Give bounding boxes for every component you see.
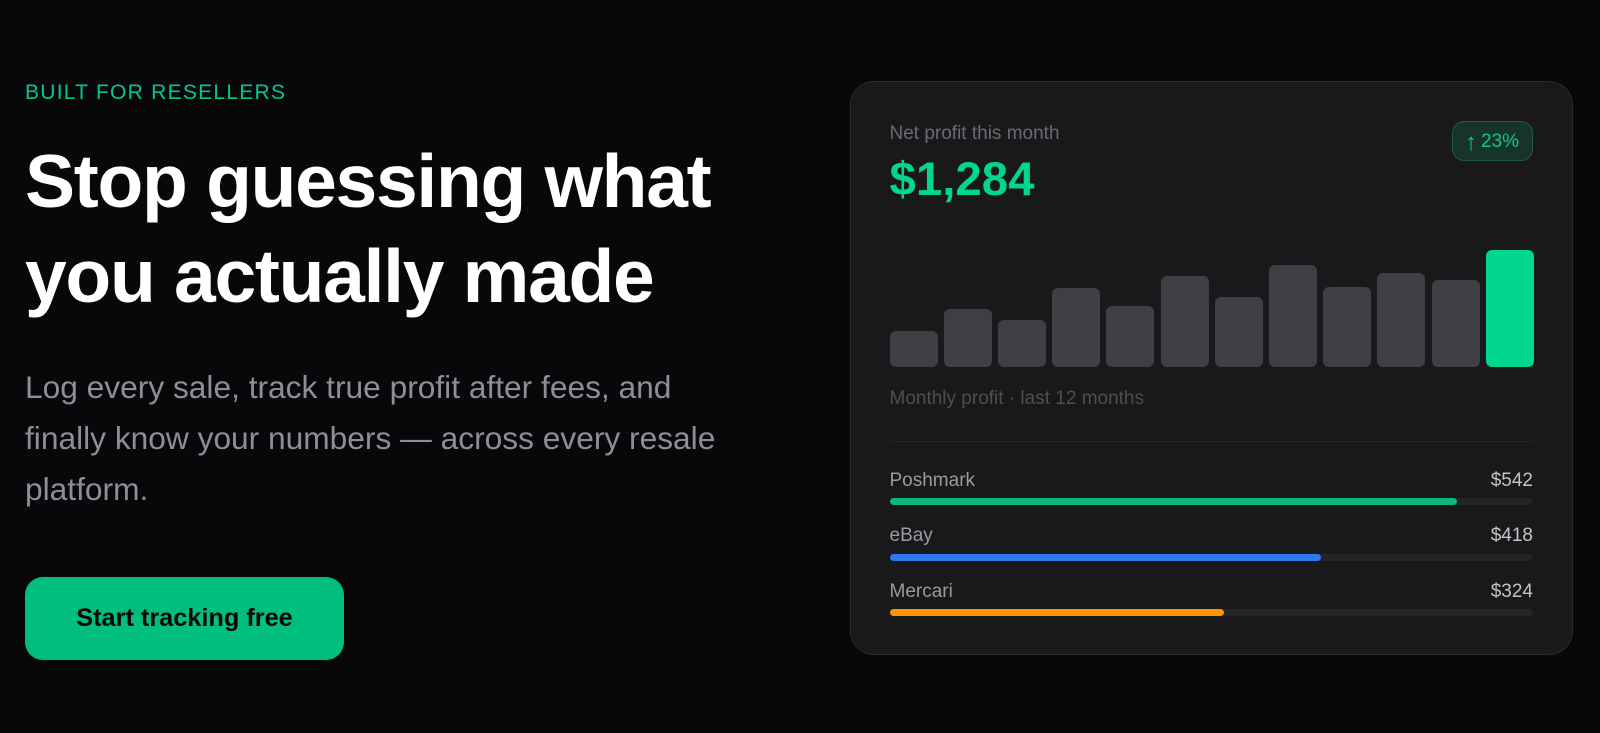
progress bar: Poshmark: [890, 498, 1533, 505]
body text: platform.: [25, 471, 148, 507]
value: net profit amount: $1,284: [890, 153, 1034, 206]
chart caption: Monthly profit · last 12 months: [890, 388, 1144, 408]
button: start tracking free: Start tracking free: [76, 604, 293, 632]
title: [25, 139, 711, 318]
platform name: eBay: eBay: [890, 525, 933, 546]
platform name: Mercari: Mercari: [890, 580, 953, 602]
title: Stop guessing what: [25, 139, 710, 223]
platform value: Poshmark: $542: [1491, 470, 1533, 490]
platform name: Poshmark: Poshmark: [890, 470, 975, 490]
badge percent: 23%: [1481, 131, 1519, 152]
title: you actually made: [25, 234, 653, 318]
progress bar: Mercari: [890, 609, 1533, 616]
badge: up 23 percent: [1452, 121, 1533, 161]
body text: [25, 369, 715, 507]
progress bar: eBay: [890, 554, 1533, 560]
label: net profit this month: Net profit this month: [890, 122, 1060, 144]
panel: profit card: [850, 81, 1573, 655]
bar chart: monthly profit: [890, 250, 1534, 367]
row: Poshmark: [890, 470, 1533, 505]
body text: Log every sale, track true profit after fees, and: [25, 369, 671, 405]
body text: finally know your numbers — across every resale: [25, 420, 715, 456]
button: start tracking free: [25, 577, 344, 660]
row: Mercari: [890, 580, 1533, 616]
eyebrow: built for resellers: BUILT FOR RESELLERS: [25, 81, 286, 104]
row: eBay: [890, 525, 1533, 561]
platform value: eBay: $418: [1491, 525, 1533, 546]
platform value: Mercari: $324: [1491, 580, 1533, 602]
badge arrow: ↑: [1465, 129, 1477, 156]
